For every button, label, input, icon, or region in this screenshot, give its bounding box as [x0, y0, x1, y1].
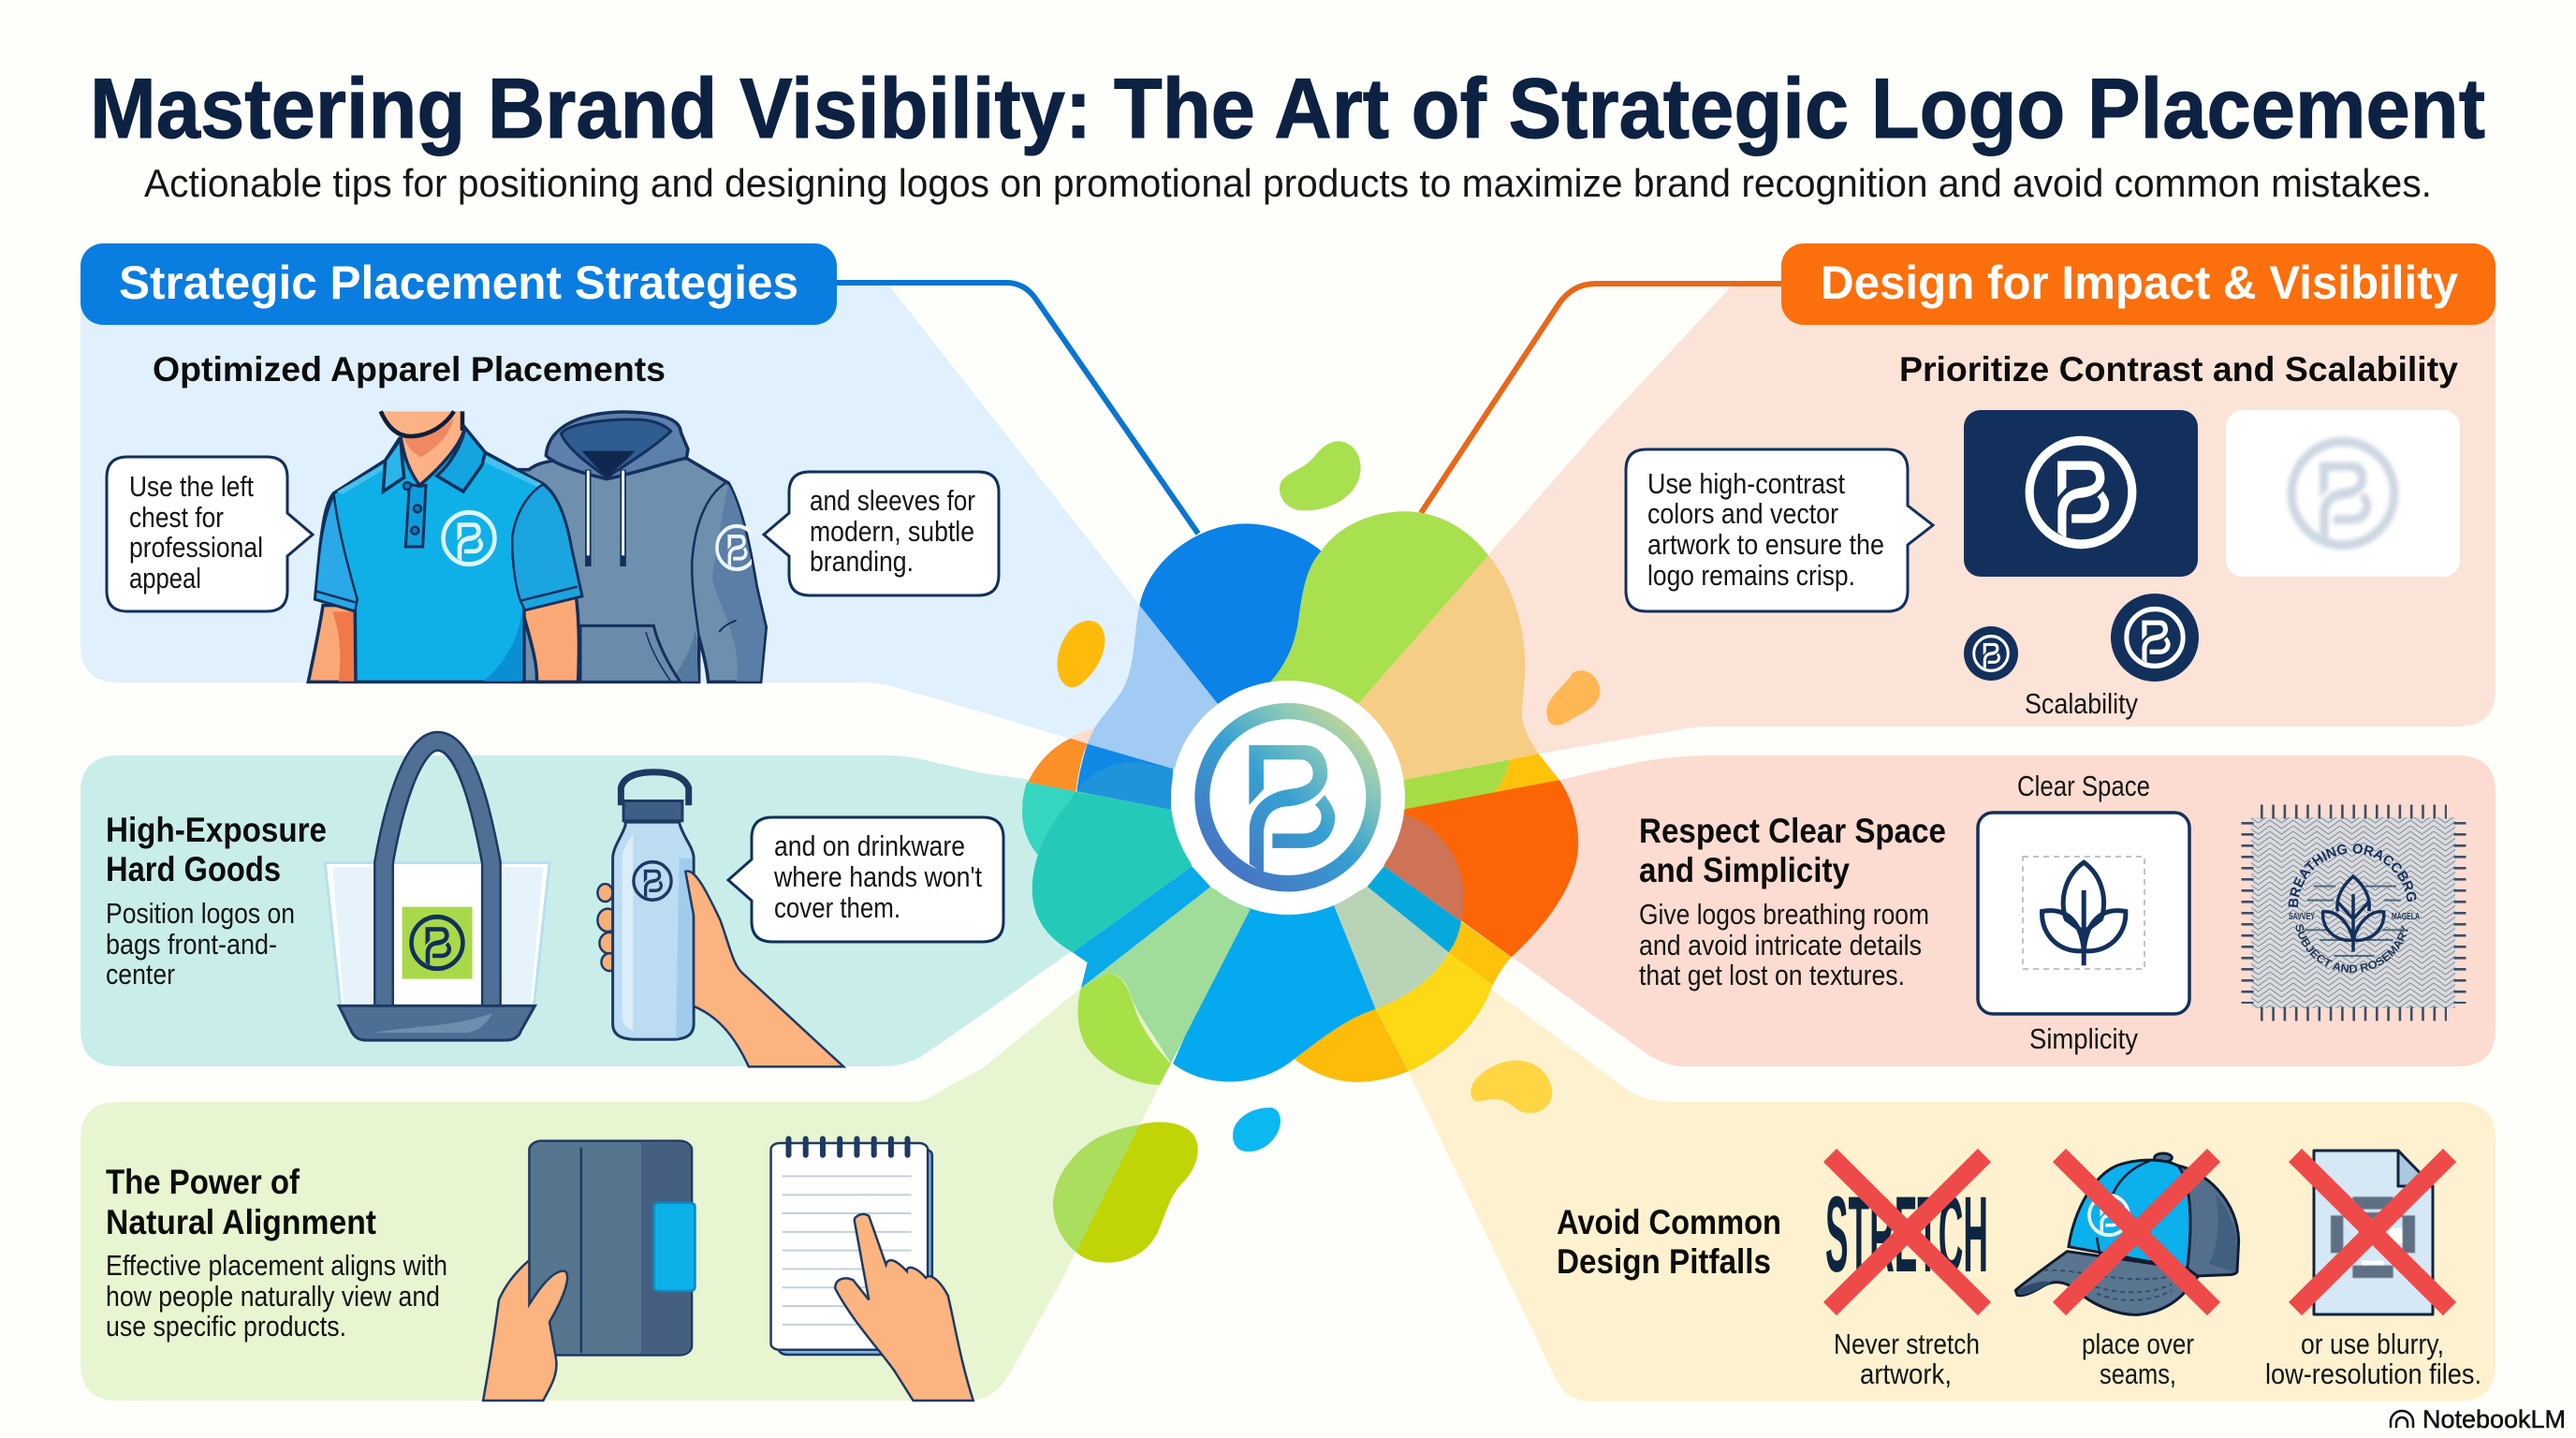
- panel: clear space background: [1310, 756, 2496, 1066]
- heading: The Power of Natural Alignment: The Power of: [106, 1163, 300, 1201]
- pitfall: stretched artwork: Never stretch: [1834, 1328, 1980, 1360]
- card: clean leaf logo with clear space: [1978, 813, 2189, 1014]
- card: intricate logo on textured fabric: MAGELA: [2392, 912, 2420, 922]
- label: Simplicity: Simplicity: [2029, 1022, 2138, 1055]
- illustration: notepad with pointing hand: [771, 1138, 973, 1401]
- illustration: polo shirt: [308, 411, 582, 682]
- icon: medium logo: [2111, 594, 2199, 682]
- heading: Respect Clear Space and Simplicity: Respect Clear Space: [1639, 812, 1946, 850]
- panel: pitfalls background: [1329, 887, 2496, 1401]
- heading: Prioritize Contrast and Scalability: Prioritize Contrast and Scalability: [1899, 350, 2458, 389]
- heading: The Power of Natural Alignment: Natural Alignment: [106, 1203, 376, 1241]
- pitfall: stretched artwork: artwork,: [1860, 1357, 1952, 1390]
- text: bags body copy: center: [106, 958, 175, 990]
- central hub: colourful blob flower: [1022, 441, 1600, 1152]
- heading: Avoid Common Design Pitfalls: Design Pitfalls: [1557, 1242, 1771, 1281]
- icon: sleeve logo: [717, 526, 756, 569]
- header: Design for Impact and Visibility: Design for Impact & Visibility: [1821, 257, 2458, 309]
- heading: Respect Clear Space and Simplicity: and Simplicity: [1639, 851, 1850, 889]
- panel: contrast and scalability background: [1288, 281, 2496, 796]
- pitfall: low resolution file: low-resolution files.: [2265, 1357, 2481, 1390]
- callout: left chest: [107, 457, 313, 611]
- icon: chest logo: [444, 512, 494, 565]
- callout: drinkware: [728, 817, 1003, 942]
- panel: natural alignment background: [80, 889, 1217, 1401]
- icon: tote logo: [412, 917, 462, 969]
- callout: drinkware: and on drinkware: [774, 829, 965, 862]
- text: alignment body copy: Effective placement aligns with: [106, 1249, 447, 1282]
- heading: Respect Clear Space and Simplicity: [1639, 812, 1946, 889]
- central logo badge: [1171, 681, 1405, 915]
- pitfall: logo over seams: place over: [2082, 1328, 2194, 1360]
- watermark: NotebookLM: NotebookLM: [2422, 1405, 2566, 1433]
- heading: Optimized Apparel Placements: Optimized Apparel Placements: [153, 350, 666, 389]
- callout: high contrast: colors and vector: [1647, 497, 1838, 530]
- card: intricate logo on textured fabric: [2241, 805, 2466, 1020]
- callout: sleeves: branding.: [810, 545, 914, 578]
- callout: sleeves: and sleeves for: [810, 484, 975, 517]
- card: intricate logo on textured fabric: BREATHING ORACCBRG: [2288, 844, 2417, 908]
- callout: left chest: professional: [129, 531, 263, 564]
- callout: sleeves: [764, 472, 999, 595]
- text: bags body copy: Position logos on: [106, 897, 295, 930]
- illustration: water bottle with hand: [597, 772, 843, 1066]
- icon: bottle logo: [634, 862, 671, 900]
- subtitle: Actionable tips for positioning and designing logos on promotional products to maximize brand recognition and avoid common mistakes.: [144, 161, 2432, 205]
- panel: hard goods background: [80, 756, 1288, 1066]
- panel: apparel placements background: [80, 281, 1288, 794]
- text: clear space body copy: that get lost on textures.: [1639, 959, 1905, 991]
- callout: high contrast: artwork to ensure the: [1647, 528, 1884, 561]
- illustration: folder with hand: [483, 1141, 695, 1401]
- illustration: tote bag: [325, 741, 549, 1040]
- callout: high contrast: Use high-contrast: [1647, 467, 1845, 500]
- icon: small logo: [1964, 626, 2018, 681]
- callout: left chest: chest for: [129, 501, 224, 534]
- callout: drinkware: cover them.: [774, 891, 900, 924]
- label: Clear Space: Clear Space: [2017, 770, 2150, 802]
- heading: Avoid Common Design Pitfalls: Avoid Common: [1557, 1203, 1781, 1241]
- logo tile: high contrast navy: [1964, 410, 2198, 577]
- pitfall: stretched artwork: [1825, 1155, 1988, 1390]
- callout: high contrast: logo remains crisp.: [1647, 559, 1855, 592]
- text: alignment body copy: [106, 1249, 447, 1343]
- label: Scalability: Scalability: [2025, 687, 2138, 720]
- illustration: hoodie: [518, 412, 766, 682]
- text: bags body copy: [106, 897, 295, 990]
- heading: High-Exposure Hard Goods: Hard Goods: [106, 850, 281, 888]
- callout: drinkware: where hands won't: [773, 860, 982, 893]
- pitfall: logo over seams: [2015, 1153, 2239, 1390]
- pitfall: logo over seams: seams,: [2100, 1357, 2176, 1390]
- heading: The Power of Natural Alignment: [106, 1163, 376, 1241]
- callout: sleeves: modern, subtle: [810, 515, 974, 548]
- text: clear space body copy: [1639, 898, 1929, 991]
- text: alignment body copy: how people naturally view and: [106, 1280, 440, 1313]
- callout: left chest: Use the left: [129, 470, 254, 503]
- text: alignment body copy: use specific products.: [106, 1310, 346, 1343]
- blob: large green lower left: [1053, 1123, 1198, 1263]
- text: clear space body copy: Give logos breathing room: [1639, 898, 1929, 931]
- text: STRETCH: [1825, 1175, 1988, 1295]
- logo tile: low contrast blurred: [2226, 410, 2460, 577]
- header: Strategic Placement Strategies: [80, 243, 837, 325]
- card: intricate logo on textured fabric: SAVVEY: [2289, 912, 2315, 922]
- text: clear space body copy: and avoid intricate details: [1639, 929, 1922, 961]
- card: intricate logo on textured fabric: SUBJECT AND ROSEMARY: [2295, 924, 2408, 973]
- heading: High-Exposure Hard Goods: High-Exposure: [106, 811, 327, 849]
- pitfall: low resolution file: or use blurry,: [2301, 1328, 2444, 1360]
- heading: Avoid Common Design Pitfalls: [1557, 1203, 1781, 1281]
- pitfall: low resolution file: [2265, 1151, 2481, 1390]
- connector line: orange header to hub: [1421, 284, 1781, 513]
- header: Design for Impact and Visibility: [1781, 243, 2496, 325]
- header: Strategic Placement Strategies: Strategic Placement Strategies: [119, 257, 798, 309]
- callout: high contrast: [1626, 449, 1933, 611]
- callout: left chest: appeal: [129, 562, 201, 594]
- text: bags body copy: bags front-and-: [106, 928, 277, 961]
- heading: High-Exposure Hard Goods: [106, 811, 327, 888]
- connector line: blue header to hub: [837, 283, 1198, 534]
